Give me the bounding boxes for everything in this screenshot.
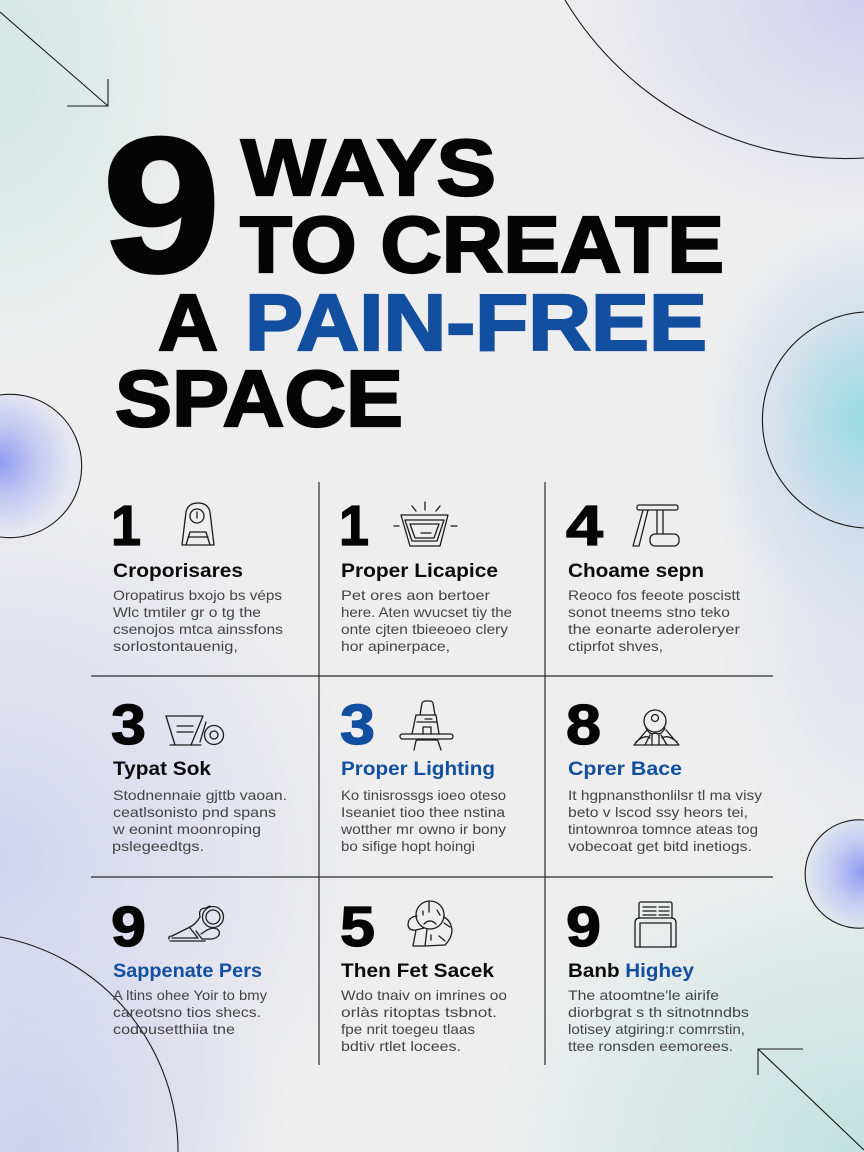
panel: item row 2 column 1 [111,693,287,854]
panel: item row 2 column 2: Proper Lighting [341,759,495,780]
panel: item row 3 column 1: careotsno tios shecs. [113,1004,261,1020]
panel: item row 1 column 2: here. Aten wvucset tiy the [341,604,512,620]
decorative circle: middle right [762,312,864,528]
decorative circle: lower right [805,820,864,928]
arrow: top left [0,12,108,106]
panel: item row 1 column 1: csenojos mtca ainssfons [113,621,283,637]
icon: reclining figure with lens [169,906,224,941]
grid lines [91,482,773,1065]
panel: item row 1 column 1: 1 [111,494,141,558]
title line: PAIN-FREE: PAIN-FREE [245,278,707,367]
panel: item row 2 column 3: tintownroa tomnce ateas tog [568,821,758,837]
panel: item row 3 column 3: Banb Highey [568,961,694,982]
icon: desk and chair [633,505,679,546]
panel: item row 1 column 1: Oropatirus bxojo bs véps [113,587,282,603]
panel: item row 1 column 1: Wlc tmtiler gr o tg the [113,604,261,620]
panel: item row 3 column 3 [566,895,749,1054]
title line: WAYS: WAYS [241,123,496,212]
panel: item row 3 column 2: fpe nrit toegeu tlaas [341,1021,475,1037]
panel: item row 1 column 2: hor apinerpace, [341,638,450,654]
panel: item row 3 column 2: Then Fet Sacek [341,961,494,982]
title line: SPACE: SPACE [115,354,403,443]
panel: item row 2 column 2: 3 [340,693,375,757]
panel: item row 1 column 2: 1 [339,494,369,558]
decorative circle: left [0,394,82,538]
panel: item row 2 column 3 [566,693,762,854]
panel: item row 1 column 3: sonot tneems stno teko [568,604,730,620]
title [103,99,724,443]
panel: item row 3 column 3: lotisey atgiring:r comrrstin, [568,1021,745,1037]
panel: item row 2 column 3: beto v lscod ssy heors tei, [568,804,748,820]
panel: item row 2 column 2 [340,693,506,854]
panel: item row 3 column 2: Wdo tnaiv on imrines oo [341,987,507,1003]
panel: item row 3 column 1: 9 [111,895,146,959]
panel: item row 3 column 2 [340,895,507,1054]
panel: item row 1 column 3: the eonarte aderoleryer [568,621,740,637]
panel: item row 1 column 3 [566,494,740,654]
decorative arc: bottom left [0,937,178,1152]
panel: item row 1 column 2: onte cjten tbieeoeo clery [341,621,508,637]
icon: machine [182,503,214,545]
title line: A: A [158,278,218,367]
title line: TO CREATE: TO CREATE [240,200,724,289]
panel: item row 1 column 1: Croporisares [113,561,243,582]
panel: item row 3 column 3: diorbgrat s th sitnotnndbs [568,1004,749,1020]
panel: item row 1 column 2: Pet ores aon bertoer [341,587,490,603]
icon: seated figure [634,710,679,745]
panel: item row 2 column 3: 8 [566,693,601,757]
panel: item row 1 column 3: 4 [566,494,603,558]
panel: item row 2 column 1: w eonint moonroping [112,821,261,837]
panel: item row 2 column 2: Ko tinisrossgs ioeo oteso [341,787,506,803]
panel: item row 2 column 3: Cprer Bace [568,759,682,780]
panel: item row 1 column 3: Reoco fos feeote poscistt [568,587,740,603]
panel: item row 1 column 2: Proper Licapice [341,561,498,582]
icon: printer [635,902,676,947]
panel: item row 2 column 1: Stodnennaie gjttb vaoan. [113,787,287,803]
panel: item row 2 column 3: vobecoat get bitd inetiogs. [568,838,752,854]
panel: item row 3 column 1: A ltins ohee Yoir to bmy [113,987,267,1003]
panel: item row 1 column 3: Choame sepn [568,561,704,582]
icon: lighting desk [400,701,453,750]
panel: item row 2 column 1: Typat Sok [113,759,211,780]
decorative arc: top right [565,0,864,159]
panel: item row 1 column 2 [339,494,512,654]
panel: item row 3 column 3: The atoomtne'le airife [568,987,719,1003]
panel: item row 2 column 2: wotther mr owno ir bony [340,821,506,837]
panel: item row 3 column 3: 9 [566,895,601,959]
panel: item row 3 column 1: Sappenate Pers [113,961,262,982]
icon: basket and disc [166,716,224,745]
panel: item row 2 column 3: It hgpnansthonlilsr tl ma visy [568,787,762,803]
panel: item row 2 column 1: 3 [111,693,146,757]
title numeral 9: 9 [103,99,220,312]
panel: item row 3 column 2: bdtiv rtlet locees. [341,1038,461,1054]
panel: item row 2 column 1: pslegeedtgs. [112,838,204,854]
panel: item row 2 column 2: Iseaniet tioo thee nstina [341,804,505,820]
panel: item row 1 column 1 [111,494,283,654]
panel: item row 1 column 3: ctiprfot shves, [568,638,663,654]
arrow: bottom right [758,1049,864,1150]
panel: item row 3 column 1 [111,895,267,1037]
icon: sad person [408,901,452,946]
panel: item row 2 column 2: bo sifige hopt hoingi [341,838,475,854]
panel: item row 3 column 1: codousetthiia tne [113,1021,235,1037]
panel: item row 3 column 2: 5 [340,895,375,959]
panel: item row 2 column 1: ceatlsonisto pnd spans [113,804,276,820]
panel: item row 3 column 3: ttee ronsden eemorees. [568,1038,733,1054]
panel: item row 1 column 1: sorlostontauenig, [113,638,238,654]
panel: item row 3 column 2: orlàs ritoptas tsbnot. [341,1004,497,1020]
icon: lamp [394,502,457,546]
